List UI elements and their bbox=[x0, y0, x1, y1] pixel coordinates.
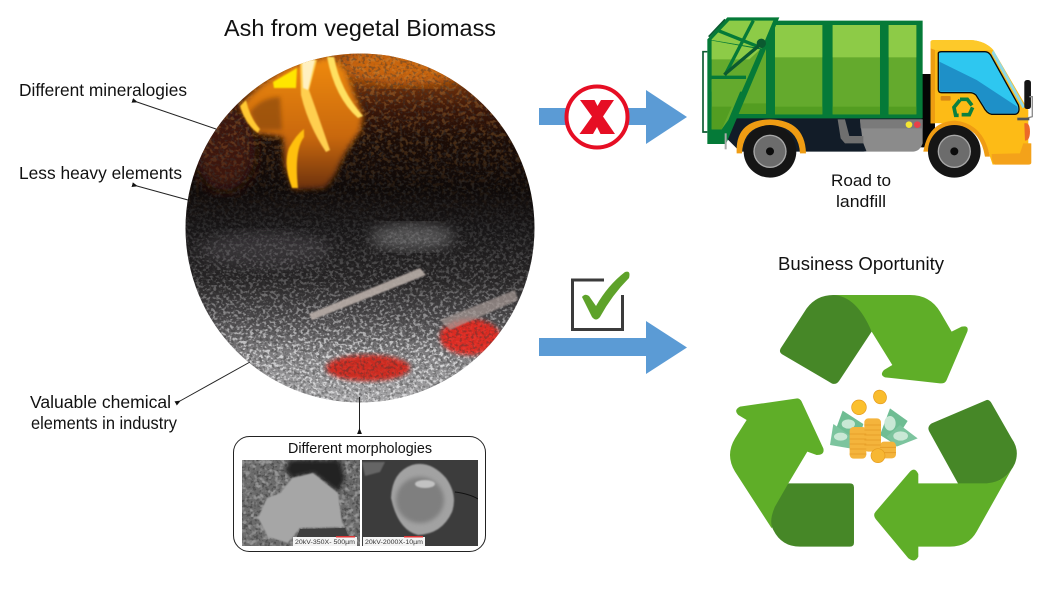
money pile bbox=[830, 388, 918, 463]
garbage truck illustration bbox=[703, 17, 1032, 178]
scale label: 20kV-350X- 500µm bbox=[295, 539, 355, 546]
icon: rejected cross bbox=[566, 86, 628, 148]
recycling symbol bbox=[730, 295, 1017, 560]
label: less heavy elements: Less heavy elements bbox=[19, 163, 182, 183]
connector: valuable chemical elements bbox=[180, 362, 250, 401]
label: different mineralogies: Different mineralogies bbox=[19, 80, 187, 100]
panel: different morphologies bbox=[234, 436, 486, 552]
label: road to landfill: landfill bbox=[836, 192, 886, 211]
flames bbox=[240, 57, 363, 190]
green cargo body bbox=[733, 21, 923, 118]
label: road to landfill bbox=[831, 171, 891, 211]
door handle bbox=[941, 96, 951, 101]
label: valuable chemical elements in industry: elements in industry bbox=[31, 413, 177, 433]
recycling arrow: top bbox=[780, 295, 968, 384]
cab window bbox=[938, 52, 1019, 114]
arrow: to business opportunity bbox=[539, 321, 687, 374]
recycling arrow: left bbox=[730, 398, 854, 547]
recycling arrow: right bbox=[874, 400, 1017, 560]
recycle symbol on door bbox=[954, 99, 973, 115]
connector: different mineralogies bbox=[137, 102, 216, 129]
micrograph: spherical particle bbox=[362, 460, 478, 546]
title: Ash from vegetal Biomass bbox=[224, 15, 496, 41]
arrow: to landfill bbox=[539, 90, 687, 144]
yellow cab bbox=[931, 40, 1032, 165]
micrograph: angular particle bbox=[242, 460, 360, 546]
grey tool box bbox=[860, 119, 923, 152]
coin stacks bbox=[850, 418, 896, 459]
scale label: 20kV-2000X-10µm bbox=[365, 539, 423, 546]
tail-light dots bbox=[906, 121, 921, 128]
front wheel bbox=[923, 121, 990, 178]
connector: morphologies bbox=[358, 397, 360, 429]
label: road to landfill: Road to bbox=[831, 171, 891, 190]
panel heading: Different morphologies bbox=[288, 441, 432, 457]
label: valuable chemical elements in industry: Valuable chemical bbox=[30, 392, 171, 412]
label: business opportunity: Business Oportunity bbox=[778, 253, 945, 274]
icon: approved check box bbox=[572, 272, 630, 330]
mirror bbox=[1024, 80, 1031, 109]
ash and flame photo circle bbox=[180, 45, 540, 405]
connector: less heavy elements bbox=[137, 186, 188, 200]
tailgate bbox=[703, 17, 779, 149]
rear wheel bbox=[737, 119, 806, 178]
label: valuable chemical elements in industry bbox=[30, 392, 177, 433]
chassis bbox=[727, 117, 930, 152]
